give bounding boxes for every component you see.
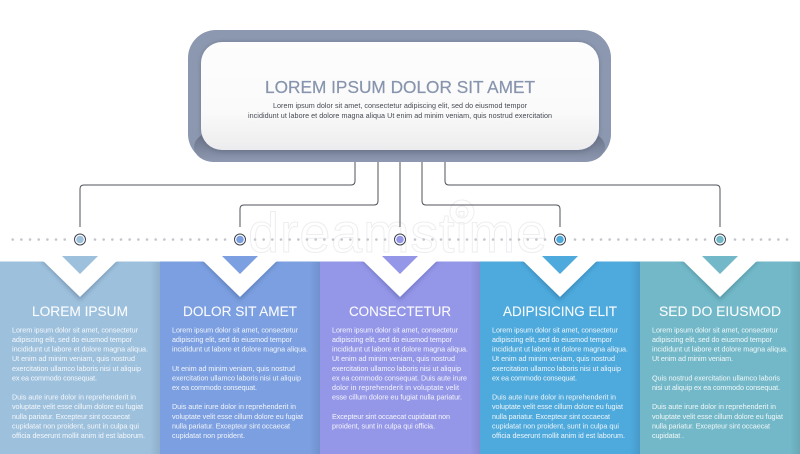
body text: ex ea commodo consequat. [12,373,97,382]
connector lines [80,160,720,227]
arrow triangle [62,256,98,274]
heading: ADIPISICING ELIT [503,304,617,319]
body text: nulla pariatur. Excepteur sint occaecat [652,421,770,430]
heading: CONSECTETUR [349,304,451,319]
body text: Duis aute irure dolor in reprehenderit in [172,402,296,411]
arrow triangle [382,256,418,274]
body text: Ut enim ad minim veniam, quis nostrud [492,354,615,363]
header text: Lorem ipsum dolor sit amet, consectetur adipiscing elit, sed do eiusmod tempor [273,101,528,110]
body text [332,326,468,430]
body text: exercitation ullamco laboris nisi ut aliquip [12,364,141,373]
body text [172,326,308,440]
heading: LOREM IPSUM [32,304,128,319]
body text: cupidatat . [652,431,684,440]
chevron [516,254,604,297]
panel: sed do eiusmod [640,254,800,454]
body text: Lorem ipsum dolor sit amet, consectetur [492,326,619,334]
body text: incididunt ut labore et dolore magna aliqua. [12,345,148,354]
chevron [356,254,444,297]
dotted timeline [13,238,790,241]
body text: Lorem ipsum dolor sit amet, consectetur [12,326,139,334]
body text: Ut enim ad minim veniam. [652,354,733,363]
body text: Lorem ipsum dolor sit amet, consectetur [652,326,779,334]
panel: adipisicing elit [480,254,640,454]
header title: LOREM IPSUM DOLOR SIT AMET [265,77,535,97]
body text: proident, sunt in culpa qui officia. [332,421,435,430]
body text: Quis nostrud exercitation ullamco laboris [652,373,780,382]
arrow triangle [542,256,578,274]
body text: adipiscing elit, sed do eiusmod tempor [12,335,133,344]
header text: incididunt ut labore et dolore magna aliqua Ut enim ad minim veniam, quis nostrud exercitation [248,111,552,120]
body text: voluptate velit esse cillum dolore eu fugiat [652,412,783,421]
body text: esse cillum dolore eu fugiat nulla pariatur. [332,393,462,402]
body text: Lorem ipsum dolor sit amet, consectetur [332,326,459,334]
body text: nulla pariatur. Excepteur sint occaecat [172,421,290,430]
body text: incididunt ut labore et dolore magna aliqua. [652,345,788,354]
heading: SED DO EIUSMOD [659,304,781,319]
body text: incididunt ut labore et dolore magna aliqua. [172,345,308,354]
body text: cupidatat non proident, sunt in culpa qui [12,421,139,430]
body text: dolor in reprehenderit in voluptate velit [332,383,459,392]
body text: exercitation ullamco laboris nisi ut aliquip [492,364,621,373]
body text: Ut enim ad minim veniam, quis nostrud [332,354,455,363]
chevron [196,254,284,297]
panel: lorem ipsum [0,254,160,454]
body text: ex ea commodo consequat. [172,383,257,392]
node 4 [554,234,566,245]
body text: adipiscing elit, sed do eiusmod tempor [492,335,613,344]
chevron [676,254,764,297]
body text: exercitation ullamco laboris nisi ut aliquip [332,364,461,373]
body text: nisi ut aliquip ex ea commodo consequat. [652,383,780,392]
body text: exercitation ullamco laboris nisi ut aliquip [172,373,301,382]
body text [12,326,148,440]
header text [248,101,552,120]
body text: adipiscing elit, sed do eiusmod tempor [332,335,453,344]
arrow triangle [702,256,738,274]
body text: voluptate velit esse cillum dolore eu fugiat [492,402,623,411]
body text: Lorem ipsum dolor sit amet, consectetur [172,326,299,334]
panel: dolor sit amet [160,254,320,454]
body text [652,326,788,440]
body text: ex ea commodo consequat. Duis aute irure [332,373,467,382]
node 5 [714,234,726,245]
node 1 [74,234,86,245]
body text: Duis aute irure dolor in reprehenderit in [12,393,136,402]
panel: consectetur [320,254,480,454]
body text: adipiscing elit, sed do eiusmod tempor [652,335,773,344]
body text: Ut enim ad minim veniam, quis nostrud [172,364,295,373]
body text: adipiscing elit, sed do eiusmod tempor [172,335,293,344]
node 3 [394,234,406,245]
body text: Duis aute irure dolor in reprehenderit in [652,402,776,411]
body text: incididunt ut labore et dolore magna aliqua. [332,345,468,354]
body text: officia deserunt mollit anim id est laborum. [12,431,145,440]
body text: voluptate velit esse cillum dolore eu fugiat [12,402,143,411]
body text: Duis aute irure dolor in reprehenderit in [492,393,616,402]
body text: cupidatat non proident. [172,431,245,440]
body text: Ut enim ad minim veniam, quis nostrud [12,354,135,363]
body text: cupidatat non proident, sunt in culpa qui [492,421,619,430]
body text: nulla pariatur. Excepteur sint occaecat [492,412,610,421]
body text: officia deserunt mollit anim id est laborum. [492,431,625,440]
arrow triangle [222,256,258,274]
chevron [36,254,124,297]
body text: voluptate velit esse cillum dolore eu fugiat [172,412,303,421]
heading: DOLOR SIT AMET [183,304,297,319]
body text: incididunt ut labore et dolore magna aliqua. [492,345,628,354]
body text: nulla pariatur. Excepteur sint occaecat [12,412,130,421]
node 2 [234,234,246,245]
watermark: dreamstime [248,201,548,264]
body text: ex ea commodo consequat. [492,373,577,382]
body text [492,326,628,440]
body text: Excepteur sint occaecat cupidatat non [332,412,450,421]
header box [188,30,611,162]
